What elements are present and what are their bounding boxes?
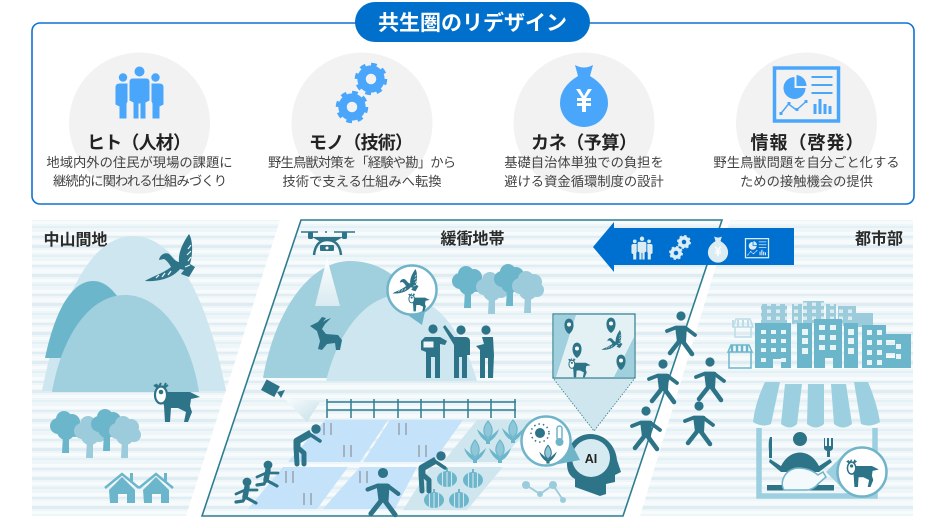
panel: buffer zone	[202, 220, 722, 516]
panel: people	[46, 52, 233, 194]
people discussing	[421, 324, 494, 378]
heading: information: 情報（啓発）	[750, 133, 864, 153]
title: 共生圏のリデザイン	[378, 11, 567, 35]
pumpkin field	[403, 467, 503, 510]
farmer	[421, 451, 446, 491]
panel: information	[713, 52, 900, 194]
rice fields	[248, 420, 463, 509]
text: information: 野生鳥獣問題を自分ごと化する	[713, 155, 900, 170]
trees	[452, 264, 544, 314]
icon: gears	[338, 65, 385, 121]
corn field	[443, 420, 535, 463]
panel: money	[504, 52, 664, 194]
heading: money: カネ（予算）	[531, 132, 637, 153]
map	[553, 314, 635, 431]
title	[355, 2, 590, 42]
callout: game meat	[826, 448, 886, 496]
trees	[50, 409, 141, 458]
text: money: 基礎自治体単独での負担を	[504, 155, 664, 170]
restaurant	[753, 382, 880, 496]
arrow: resources to buffer zone	[593, 222, 794, 272]
label: buffer zone: 緩衝地帯	[440, 229, 505, 248]
icon: dashboard	[774, 68, 838, 121]
icon: drone	[301, 232, 355, 255]
text: technology: 野生鳥獣対策を「経験や勘」から	[268, 154, 456, 170]
small shops	[728, 319, 753, 368]
walking people	[632, 311, 724, 449]
icon: deer	[154, 383, 200, 422]
fence	[327, 399, 516, 418]
icon: bird	[145, 234, 195, 281]
farmer	[296, 424, 321, 464]
camera beam	[284, 398, 320, 422]
panel: redesign frame	[32, 2, 914, 204]
callout: environment data	[522, 416, 580, 466]
label: urban area: 都市部	[855, 229, 903, 248]
icon: deer silhouette	[310, 317, 342, 350]
text: money: 避ける資金循環制度の設計	[504, 174, 664, 189]
text: people: 継続的に関われる仕組みづくり	[53, 172, 227, 188]
text: information: ための接触機会の提供	[740, 174, 873, 189]
houses	[105, 473, 173, 503]
mountains	[263, 261, 477, 381]
icon: money bag	[560, 65, 608, 127]
network graph	[522, 481, 566, 503]
buildings front	[755, 319, 911, 368]
text: people: 地域内外の住民が現場の課題に	[46, 155, 233, 170]
running children	[236, 461, 278, 503]
drone beam	[315, 258, 340, 306]
label: mountain area: 中山間地	[43, 231, 108, 249]
text: technology: 技術で支える仕組みへ転換	[282, 174, 442, 189]
panel: technology	[268, 52, 456, 194]
heading: technology: モノ（技術）	[309, 132, 413, 153]
icon: camera	[261, 379, 285, 398]
icon: people	[116, 66, 164, 118]
mountains	[42, 236, 226, 392]
callout: wildlife	[388, 266, 436, 325]
heading: people: ヒト（人材）	[87, 133, 191, 153]
panel: mountain area	[32, 220, 280, 516]
walker in field	[368, 468, 398, 515]
icon: AI head	[567, 434, 621, 496]
buildings back	[761, 301, 873, 327]
icon: AI head: AI	[585, 452, 597, 466]
panel: urban area	[640, 220, 913, 516]
